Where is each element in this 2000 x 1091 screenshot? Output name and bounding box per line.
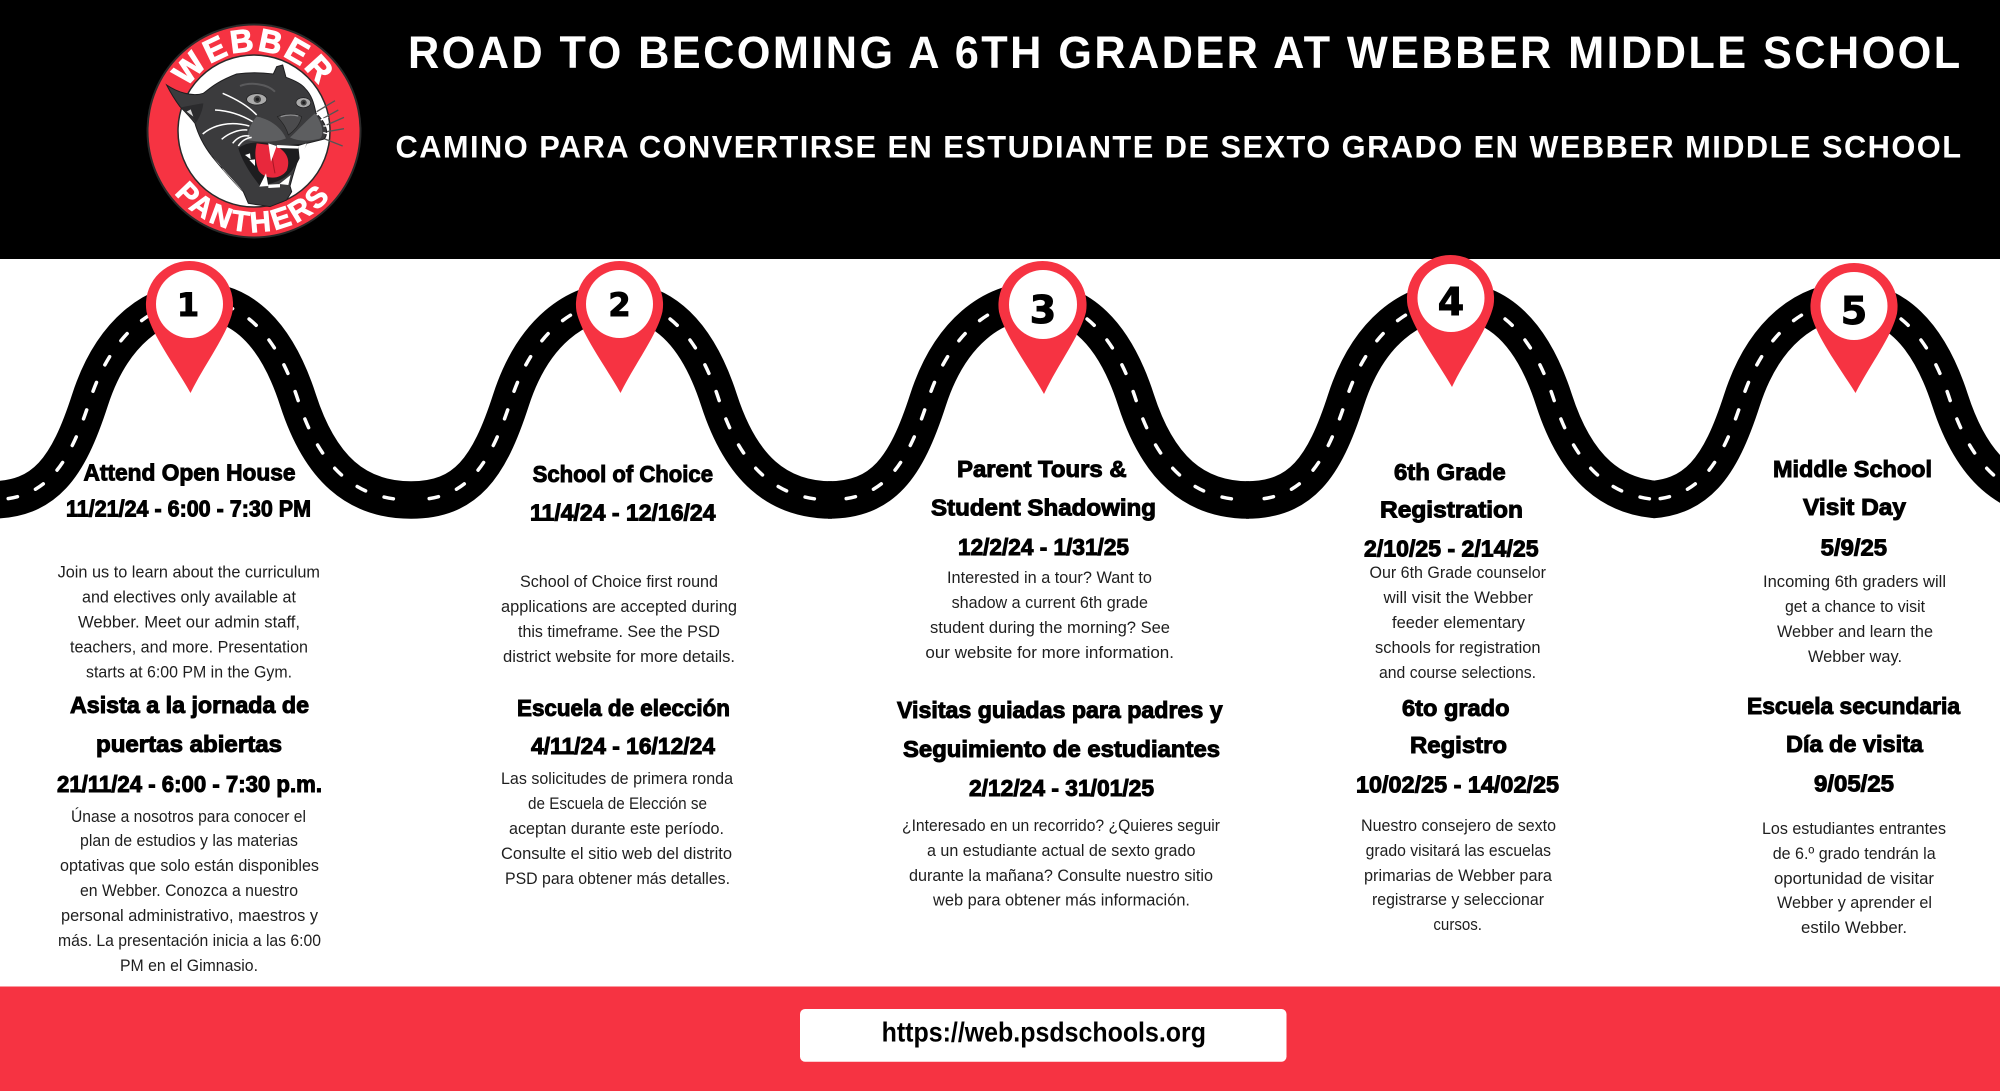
pin 5 xyxy=(1810,263,1898,393)
step 1 Spanish body: optativas que solo están disponibles xyxy=(60,856,319,875)
step 2 Spanish body xyxy=(501,769,734,888)
step 2 English body: applications are accepted during xyxy=(501,597,737,616)
step 4 English heading: Registration xyxy=(1380,496,1523,522)
step 5 English heading: Middle School xyxy=(1773,456,1932,482)
step 3 English body: Interested in a tour? Want to xyxy=(947,568,1152,587)
step 5 Spanish body xyxy=(1762,819,1946,937)
logo: Webber Panthers xyxy=(146,24,362,238)
step 1 Spanish heading: puertas abiertas xyxy=(96,731,282,757)
footer link box: https://web.psdschools.org xyxy=(882,1017,1206,1048)
road xyxy=(0,301,2000,500)
step 5 Spanish body: de 6.º grado tendrán la xyxy=(1773,844,1936,863)
panel: step 2 school of choice xyxy=(501,461,737,888)
step 2 Spanish body: PSD para obtener más detalles. xyxy=(505,869,730,888)
pin 4: 4 xyxy=(1438,280,1464,324)
step 3 English heading: 12/2/24 - 1/31/25 xyxy=(958,534,1129,560)
pin 3 xyxy=(998,261,1087,394)
step 3 Spanish body: web para obtener más información. xyxy=(932,891,1190,910)
panel: step 1 open house xyxy=(57,460,322,975)
step 3 English body xyxy=(925,568,1174,662)
pin 3: 3 xyxy=(1030,288,1056,332)
step 3 Spanish heading xyxy=(897,697,1223,801)
step 1 Spanish body: PM en el Gimnasio. xyxy=(120,956,258,975)
step 4 Spanish heading: Registro xyxy=(1410,732,1507,758)
step 2 English body: district website for more details. xyxy=(503,647,735,666)
step 2 Spanish body: aceptan durante este período. xyxy=(509,819,724,838)
step 5 English heading: 5/9/25 xyxy=(1821,535,1887,561)
pin 4 xyxy=(1407,255,1494,387)
step 1 Spanish heading: Asista a la jornada de xyxy=(70,692,309,718)
header band xyxy=(0,0,2000,259)
step 1 Spanish body xyxy=(58,807,321,975)
step 4 Spanish body: cursos. xyxy=(1433,915,1482,934)
step 1 Spanish body: personal administrativo, maestros y xyxy=(61,906,318,925)
step 5 English heading: Visit Day xyxy=(1803,494,1906,520)
step 4 Spanish body xyxy=(1361,816,1556,934)
step 4 English body: schools for registration xyxy=(1375,638,1541,657)
footer link box xyxy=(800,1009,1286,1062)
step 5 English heading xyxy=(1773,456,1932,561)
step 1 Spanish heading: 21/11/24 - 6:00 - 7:30 p.m. xyxy=(57,771,322,797)
step 2 Spanish heading xyxy=(517,695,730,759)
step 1 English body: Join us to learn about the curriculum xyxy=(58,562,320,582)
pin 2: 2 xyxy=(608,286,631,324)
step 5 Spanish heading: Día de visita xyxy=(1786,731,1924,757)
step 1 English body: teachers, and more. Presentation xyxy=(70,638,308,656)
step 5 Spanish heading: Escuela secundaria xyxy=(1747,693,1961,719)
title English: ROAD TO BECOMING A 6TH GRADER AT WEBBER MIDDLE SCHOOL xyxy=(408,27,1963,78)
step 2 English body: School of Choice first round xyxy=(520,572,718,591)
pin 5: 5 xyxy=(1841,289,1867,333)
panel: step 3 parent tours xyxy=(897,456,1223,910)
step 5 Spanish heading xyxy=(1747,693,1961,797)
step 3 Spanish heading: Seguimiento de estudiantes xyxy=(903,736,1220,762)
pin 1 xyxy=(146,261,233,393)
step 4 English body: feeder elementary xyxy=(1392,613,1525,632)
step 1 English heading xyxy=(66,460,311,522)
step 5 Spanish body: estilo Webber. xyxy=(1801,918,1907,937)
step 1 Spanish body: Únase a nosotros para conocer el xyxy=(71,807,306,826)
step 2 Spanish heading: 4/11/24 - 16/12/24 xyxy=(531,733,715,759)
step 4 Spanish body: grado visitará las escuelas xyxy=(1366,841,1551,860)
step 1 English body: and electives only available at xyxy=(82,588,296,606)
step 4 Spanish heading: 6to grado xyxy=(1402,695,1510,721)
step 5 English body: Webber way. xyxy=(1808,647,1902,666)
panel: step 5 visit day xyxy=(1747,456,1961,937)
step 3 Spanish heading: Visitas guiadas para padres y xyxy=(897,697,1223,723)
step 1 Spanish body: más. La presentación inicia a las 6:00 xyxy=(58,931,321,950)
step 3 English body: student during the morning? See xyxy=(930,618,1170,637)
step 3 Spanish heading: 2/12/24 - 31/01/25 xyxy=(969,775,1154,801)
step 5 English body: Webber and learn the xyxy=(1777,622,1933,641)
step 3 Spanish body: ¿Interesado en un recorrido? ¿Quieres seguir xyxy=(902,816,1220,835)
step 2 Spanish body: Consulte el sitio web del distrito xyxy=(501,844,732,863)
step 5 English body: get a chance to visit xyxy=(1785,597,1925,616)
step 5 English body xyxy=(1763,572,1946,666)
step 3 Spanish body: a un estudiante actual de sexto grado xyxy=(927,841,1195,860)
step 3 English heading: Parent Tours & xyxy=(957,456,1127,482)
step 3 English body: shadow a current 6th grade xyxy=(952,593,1148,612)
step 1 English body: starts at 6:00 PM in the Gym. xyxy=(86,662,292,682)
pin 1: 1 xyxy=(177,286,199,324)
logo: Webber Panthers: PANTHERS xyxy=(174,180,328,233)
footer band xyxy=(0,986,2000,1091)
step 3 Spanish body xyxy=(902,816,1220,910)
step 4 English heading xyxy=(1364,459,1539,562)
step 3 English heading xyxy=(931,456,1156,560)
step 4 English body: and course selections. xyxy=(1379,663,1536,682)
step 4 Spanish body: registrarse y seleccionar xyxy=(1372,890,1544,909)
step 2 English heading xyxy=(530,461,716,526)
step 4 Spanish body: Nuestro consejero de sexto xyxy=(1361,816,1556,835)
step 4 English body: will visit the Webber xyxy=(1383,588,1533,607)
step 4 English body: Our 6th Grade counselor xyxy=(1370,563,1546,582)
step 4 English body xyxy=(1370,563,1546,682)
step 2 Spanish body: de Escuela de Elección se xyxy=(528,794,707,813)
step 5 English body: Incoming 6th graders will xyxy=(1763,572,1946,591)
pin 2 xyxy=(576,261,663,393)
step 2 English body: this timeframe. See the PSD xyxy=(518,622,720,641)
step 1 English body: Webber. Meet our admin staff, xyxy=(78,612,300,632)
logo: Webber Panthers: WEBBER xyxy=(170,28,332,86)
step 2 Spanish body: Las solicitudes de primera ronda xyxy=(501,769,734,788)
step 2 Spanish heading: Escuela de elección xyxy=(517,695,730,721)
step 4 Spanish heading: 10/02/25 - 14/02/25 xyxy=(1356,772,1559,798)
step 2 English heading: School of Choice xyxy=(533,461,713,487)
step 4 Spanish heading xyxy=(1356,695,1559,798)
step 1 Spanish body: plan de estudios y las materias xyxy=(80,831,298,850)
step 5 Spanish body: oportunidad de visitar xyxy=(1774,869,1934,888)
step 2 English body xyxy=(501,572,737,666)
panel: step 4 registration xyxy=(1356,459,1559,934)
step 2 English heading: 11/4/24 - 12/16/24 xyxy=(530,500,716,526)
step 3 English body: our website for more information. xyxy=(925,643,1174,662)
step 1 English body xyxy=(58,562,320,682)
step 5 Spanish heading: 9/05/25 xyxy=(1814,771,1894,797)
step 4 Spanish body: primarias de Webber para xyxy=(1364,866,1553,885)
step 3 Spanish body: durante la mañana? Consulte nuestro sitio xyxy=(909,866,1213,885)
step 4 English heading: 2/10/25 - 2/14/25 xyxy=(1364,536,1539,562)
step 1 Spanish body: en Webber. Conozca a nuestro xyxy=(80,881,298,900)
step 1 Spanish heading xyxy=(57,692,322,797)
step 3 English heading: Student Shadowing xyxy=(931,494,1156,520)
step 1 English heading: 11/21/24 - 6:00 - 7:30 PM xyxy=(66,496,311,522)
title Spanish: CAMINO PARA CONVERTIRSE EN ESTUDIANTE DE SEXTO GRADO EN WEBBER MIDDLE SCHOOL xyxy=(396,128,1962,164)
step 4 English heading: 6th Grade xyxy=(1394,459,1506,485)
step 5 Spanish body: Webber y aprender el xyxy=(1777,893,1932,912)
step 1 English heading: Attend Open House xyxy=(84,460,296,486)
step 5 Spanish body: Los estudiantes entrantes xyxy=(1762,819,1946,838)
